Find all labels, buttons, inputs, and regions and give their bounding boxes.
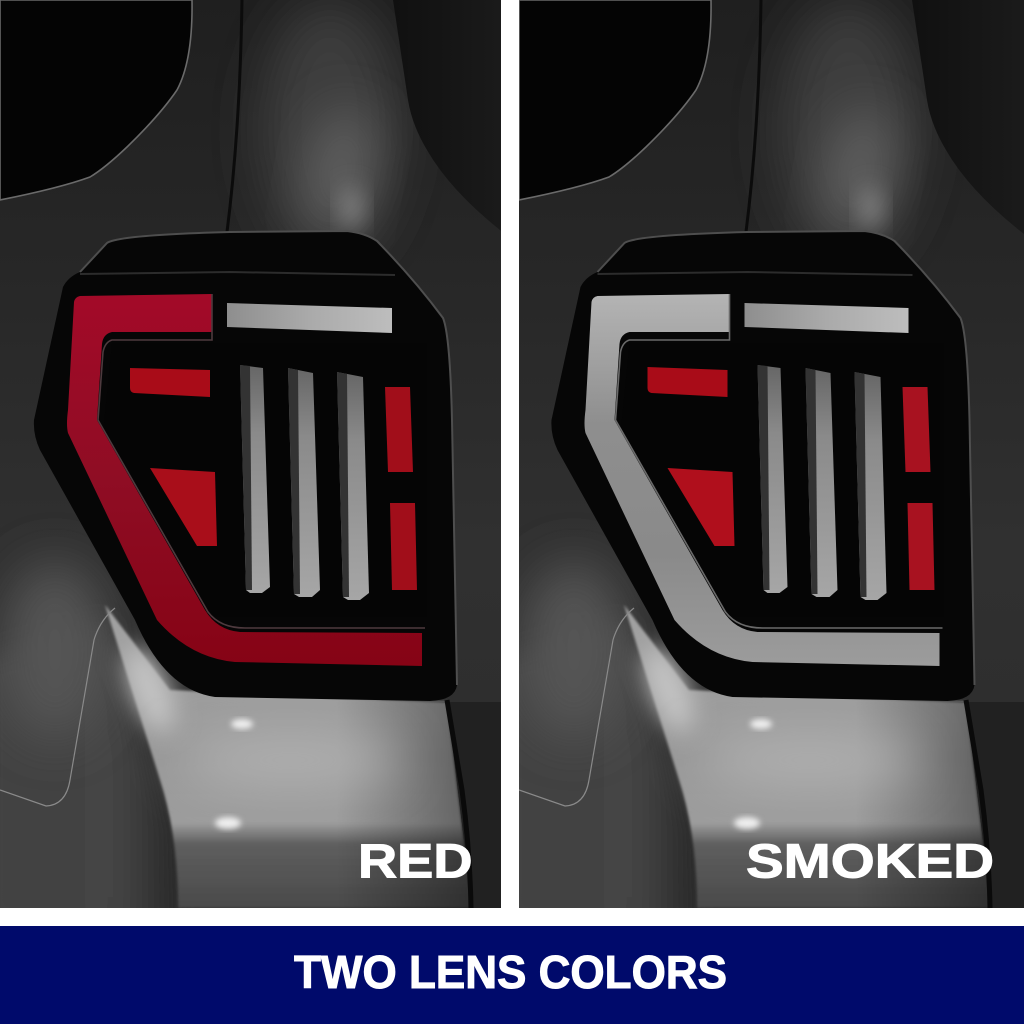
red reflector lower right: [908, 503, 934, 590]
smoked light bar: [584, 294, 940, 666]
tail light: [34, 231, 457, 701]
red reflector upper right: [385, 387, 413, 472]
inner lens cavity: [620, 343, 944, 617]
red light bar: [67, 294, 422, 666]
panel: red lens: [0, 0, 510, 930]
red reflector lower left: [668, 468, 734, 546]
panel: smoked lens: [499, 0, 1024, 930]
label: RED: RED: [358, 836, 472, 888]
vertical light bar 2: [806, 368, 838, 597]
rear door glass: [393, 0, 501, 230]
housing top edge: [598, 231, 974, 685]
tail light housing: [34, 231, 457, 701]
red reflector lower left: [150, 468, 217, 546]
banner heading: TWO LENS COLORS: [294, 946, 727, 998]
white reverse strip: [227, 303, 392, 333]
vertical light bar 3: [337, 372, 369, 600]
rear side window: [519, 0, 711, 200]
white reverse strip: [744, 303, 908, 333]
rear door glass: [912, 0, 1024, 238]
upper lens line: [80, 272, 395, 275]
tail light: [551, 231, 974, 701]
inner lens cavity: [103, 343, 427, 617]
rear side window: [0, 0, 192, 200]
label: SMOKED: SMOKED: [746, 836, 994, 888]
vehicle body: [0, 0, 510, 930]
tail light housing: [551, 231, 974, 701]
upper lens line: [598, 272, 912, 275]
red reflector upper left: [648, 367, 728, 397]
vertical light bar 3: [854, 372, 886, 600]
red reflector lower right: [390, 503, 417, 590]
body seam: [227, 0, 242, 232]
vehicle body: [499, 0, 1024, 930]
banner: [0, 926, 1024, 1024]
vertical light bar 1: [758, 365, 788, 593]
light bar rim: [98, 294, 425, 628]
housing top edge: [80, 231, 457, 685]
vertical light bar 2: [288, 368, 320, 597]
red reflector upper left: [130, 368, 210, 397]
red reflector upper right: [902, 387, 930, 472]
body seam: [746, 0, 761, 232]
vertical light bar 1: [240, 365, 270, 593]
light bar rim: [616, 294, 942, 628]
